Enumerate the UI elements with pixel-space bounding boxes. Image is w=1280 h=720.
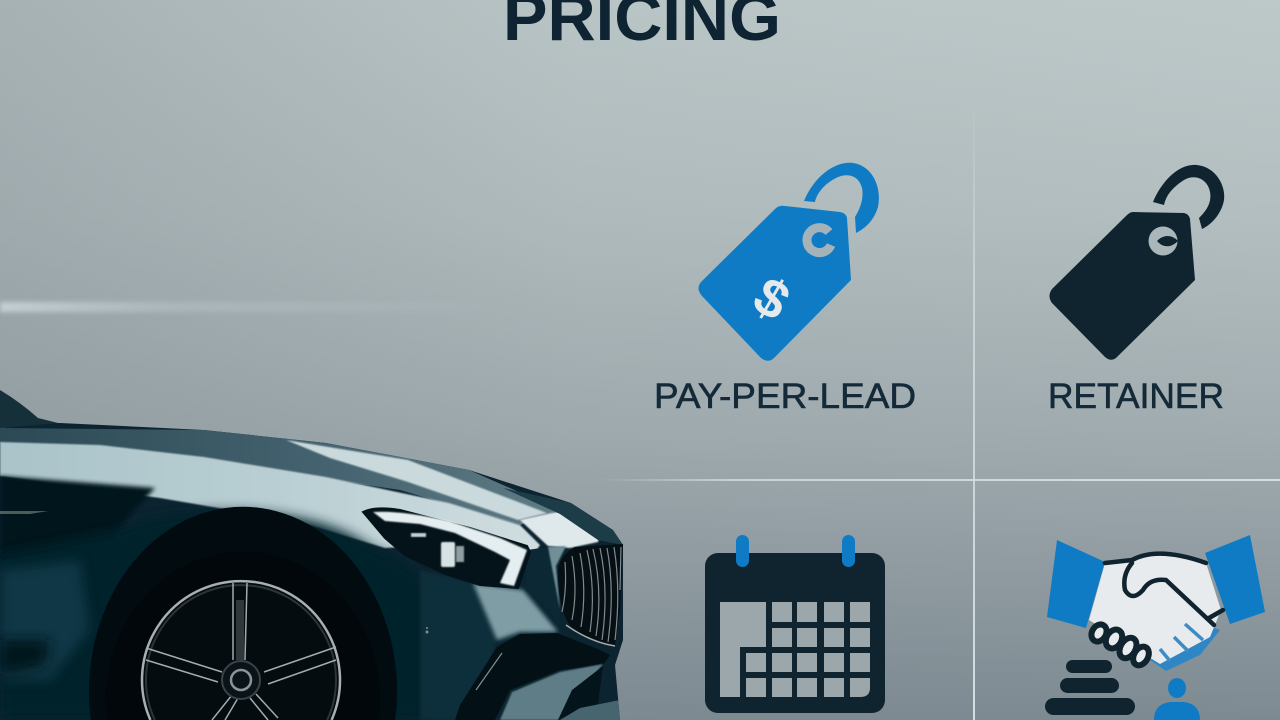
grille <box>558 544 623 646</box>
car body <box>0 423 623 720</box>
icon: person <box>1154 678 1200 720</box>
icon: blue price tag <box>698 163 879 361</box>
front bumper panel <box>473 583 558 640</box>
body shading <box>0 428 623 720</box>
label: retainer: RETAINER <box>1048 377 1224 416</box>
front intake <box>455 633 610 720</box>
vertical divider <box>973 96 975 720</box>
windshield pillar <box>0 390 62 428</box>
label: pay-per-lead: PAY-PER-LEAD <box>654 377 916 416</box>
icon: handshake <box>1047 535 1265 671</box>
car <box>0 390 623 720</box>
horizontal divider <box>600 479 1280 481</box>
dollar sign: $ <box>743 265 800 332</box>
icon: coin stack <box>1045 660 1135 715</box>
headlight <box>363 508 530 588</box>
wheel arch <box>89 507 397 720</box>
light streak <box>0 302 500 312</box>
wheel <box>142 581 340 720</box>
icon: calendar <box>705 535 885 713</box>
icon: dark price tag <box>1050 165 1224 360</box>
